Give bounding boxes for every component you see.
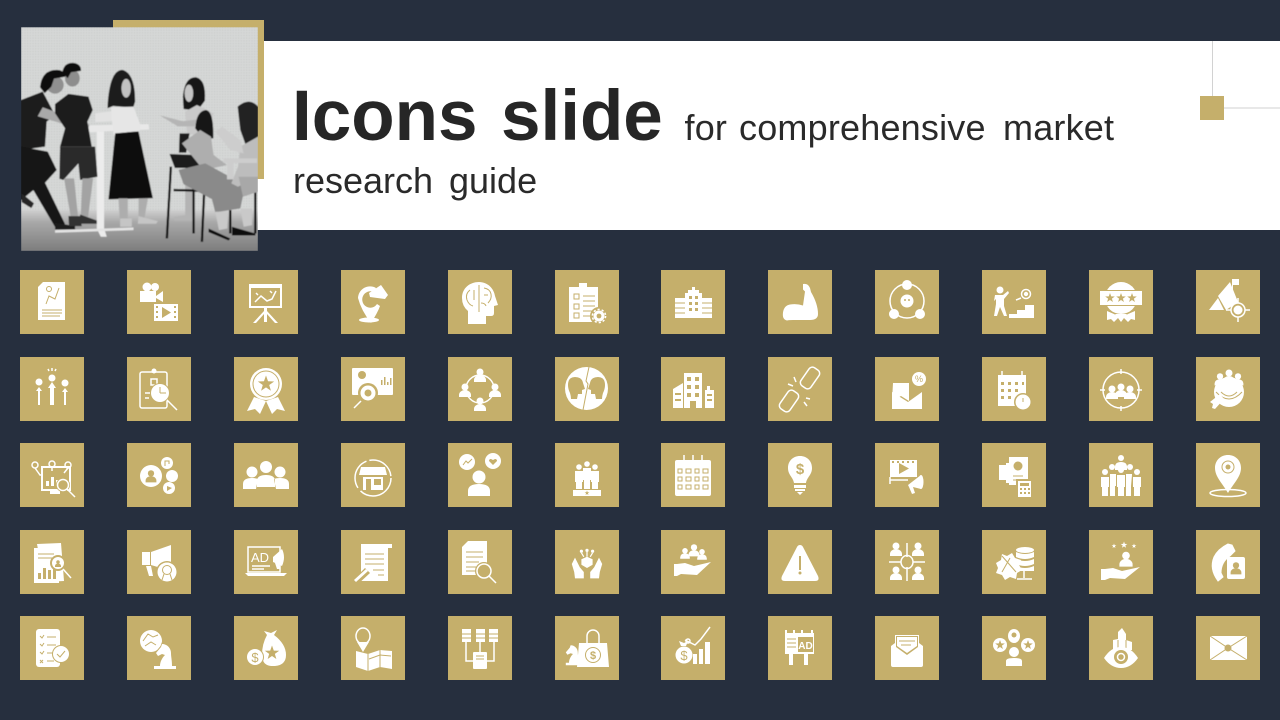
subheading line 2: guide [449,160,537,201]
icon: hands holding box [555,530,619,594]
icon: document and calculator [982,443,1046,507]
icon: ring of four people [448,357,512,421]
heading: Icons slide: Icons [292,77,477,156]
woman in black skirt [107,70,158,227]
icon: lightbulb with dollar [768,443,832,507]
icon: hand supporting people [661,530,725,594]
icon: gear wrench and database [982,530,1046,594]
icon: team on podium [555,443,619,507]
icon: store in a ring [341,443,405,507]
man seated left [21,70,89,229]
icon: social media circles [127,443,191,507]
icon: head with brain [448,270,512,334]
icon: person with three bubbles [982,616,1046,680]
icon: lightbulb with dollar: $ [796,461,805,478]
icon: AD billboard [768,616,832,680]
icon: laptop AD with megaphone: AD [251,550,269,565]
icon: person climbing steps [982,270,1046,334]
icon: sealed envelope [1196,616,1260,680]
icon: flexed arm [768,270,832,334]
subheading line 1: for [684,107,727,148]
icon: warning triangle [768,530,832,594]
icon: award rosette with star [234,357,298,421]
icon: folded map with pin [341,616,405,680]
icon: people on arrow target [1196,357,1260,421]
icon: strategy document [20,270,84,334]
icon: map location pin [1196,443,1260,507]
icon: scroll with pen [341,530,405,594]
icon: film and megaphone [875,443,939,507]
icon: rising dollar arrows [20,357,84,421]
table [55,111,149,237]
subheading line 1: market [1003,107,1114,148]
icon: laptop AD with megaphone [234,530,298,594]
icon: location pin with megaphone [341,270,405,334]
icon: money bag and growth chart [661,616,725,680]
icon: database servers flow [448,616,512,680]
icon: report with magnifier [20,530,84,594]
title [292,77,1114,201]
man standing [55,63,97,226]
icon: city buildings [661,357,725,421]
icon: mountains with flag and target [1196,270,1260,334]
subheading line 2: research [293,160,433,201]
icon: envelope with percent [875,357,939,421]
chair [167,154,255,242]
header band [240,41,1280,230]
icon: eye and city [1089,616,1153,680]
icon: monitor with nodes and magnifier [20,443,84,507]
icon: three-star badge [1089,270,1153,334]
icon: three person group [234,443,298,507]
icon: clipboard checklist with gear [555,270,619,334]
subheading line 1: comprehensive [739,107,986,148]
icon: two faces in a circle [555,357,619,421]
icon: wall calendar [661,443,725,507]
photo: team meeting [21,27,258,251]
icon: money bag and coin [234,616,298,680]
woman far right [215,102,258,197]
icon: presentation board [234,270,298,334]
seated woman [179,110,255,240]
icon: envelope with percent: % [915,374,923,384]
icon: person with speech bubbles [448,443,512,507]
icon: mobile checklist [20,616,84,680]
corner accent [1200,41,1280,120]
icon: knight and shopping bag [555,616,619,680]
gold accent block behind photo [113,20,264,179]
icon: target with group [1089,357,1153,421]
icon: phone and contact card [1196,530,1260,594]
icon: megaphone with badge [127,530,191,594]
icon: office buildings [661,270,725,334]
icon: people around crosshair [875,530,939,594]
icon: dashboard with magnifier [341,357,405,421]
icon: clipboard with magnifier [127,357,191,421]
icon: video camera and film [127,270,191,334]
icon: knight and shopping bag: $ [590,650,596,662]
icon: document with magnifier [448,530,512,594]
icon: chess knight and handshake [127,616,191,680]
icon: group of people [1089,443,1153,507]
icon: circular network of nodes [875,270,939,334]
icon: AD billboard: AD [798,641,813,652]
icon: money bag and growth chart: $ [680,648,688,663]
woman standing right [160,77,214,221]
heading: Icons slide: slide [501,77,663,156]
icon: money bag and coin: $ [251,650,259,665]
icon: open envelope with card [875,616,939,680]
icon: calendar with clock [982,357,1046,421]
icon: hand with person and stars [1089,530,1153,594]
icon: broken chain link [768,357,832,421]
